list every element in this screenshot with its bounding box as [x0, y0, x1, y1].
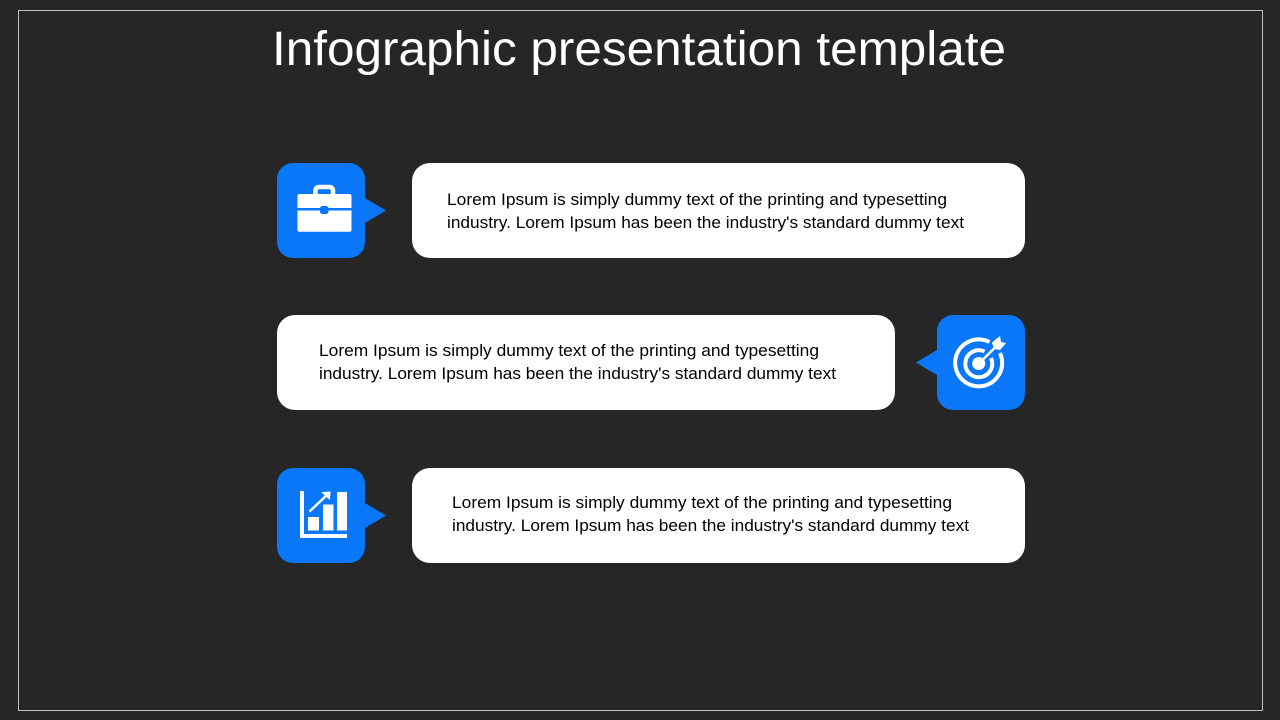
- text card 1: [412, 163, 1025, 258]
- row 2: target item: [277, 315, 1025, 410]
- text card 2: Lorem Ipsum is simply dummy text of the printing and typesetting: [319, 341, 819, 360]
- text card 1: Lorem Ipsum is simply dummy text of the printing and typesetting: [447, 190, 947, 209]
- text card 2: industry. Lorem Ipsum has been the industry's standard dummy text: [319, 364, 836, 383]
- row 3: chart item: [277, 468, 1025, 563]
- icon: target badge: [916, 315, 1025, 410]
- title: Infographic presentation template: [272, 23, 1006, 76]
- text card 3: [412, 468, 1025, 563]
- text card 1: industry. Lorem Ipsum has been the industry's standard dummy text: [447, 213, 964, 232]
- text card 3: industry. Lorem Ipsum has been the industry's standard dummy text: [452, 516, 969, 535]
- icon: bar chart badge: [277, 468, 386, 563]
- icon: briefcase badge: [277, 163, 386, 258]
- text card 3: Lorem Ipsum is simply dummy text of the printing and typesetting: [452, 493, 952, 512]
- text card 2: [277, 315, 895, 410]
- row 1: briefcase item: [277, 163, 1025, 258]
